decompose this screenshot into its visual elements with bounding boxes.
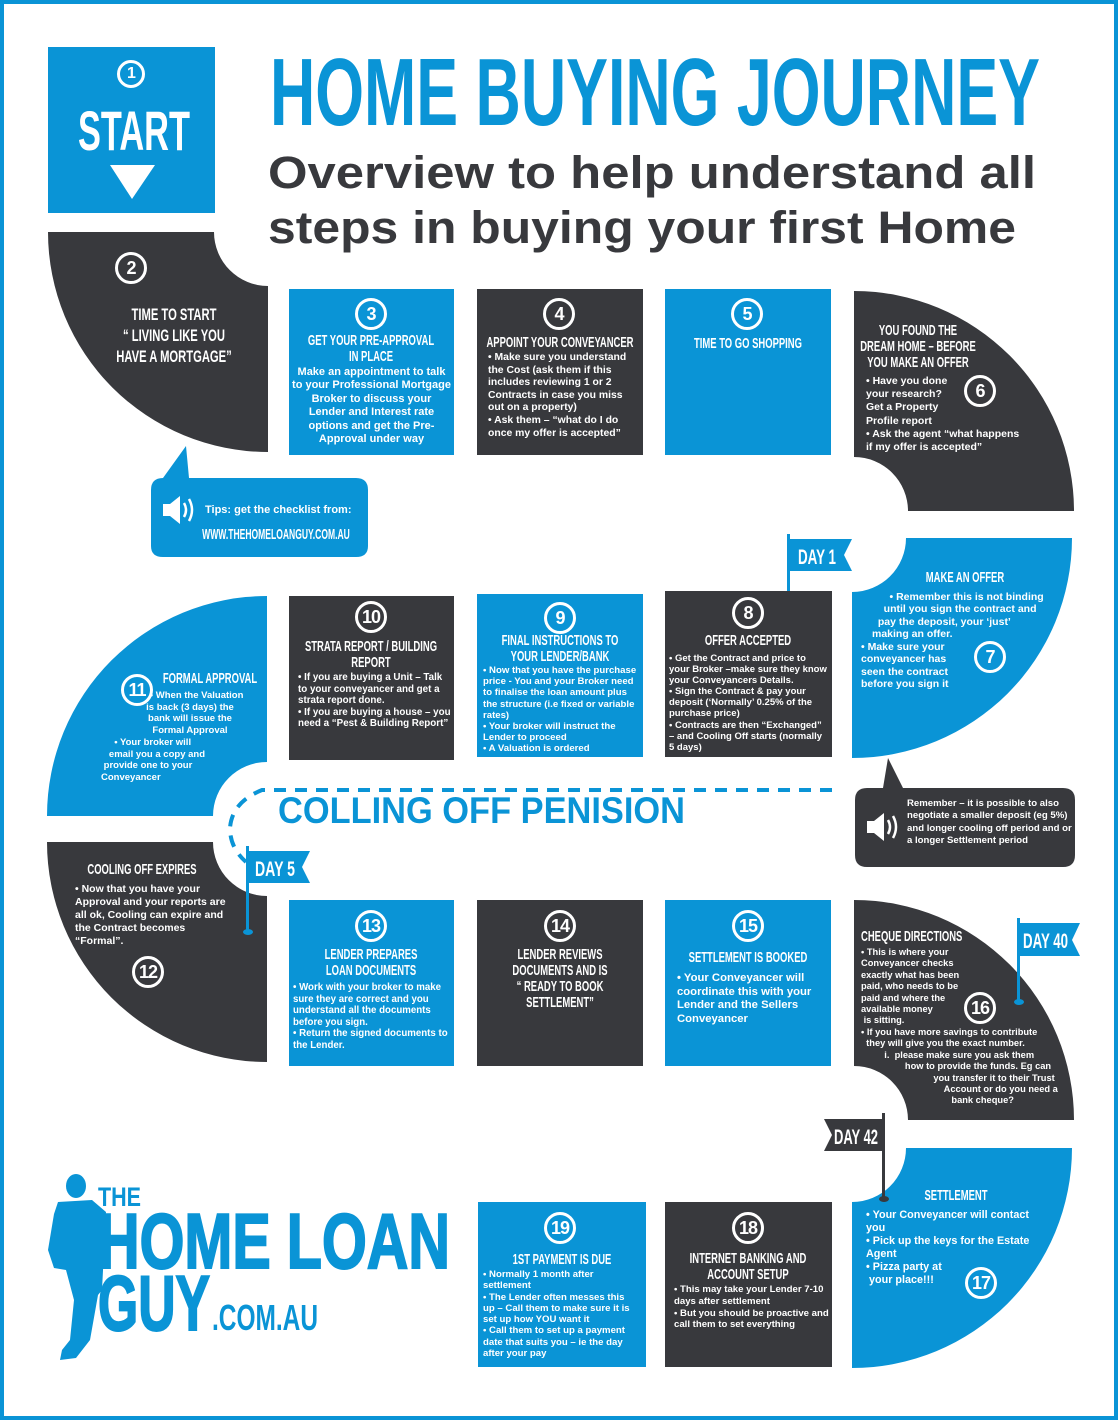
- step 9: • Your broker will instruct the Lender to proceed: [483, 721, 616, 743]
- step 9: • A Valuation is ordered: [483, 743, 590, 754]
- step 14: LENDER REVIEWS: [517, 946, 603, 963]
- step 4: [477, 289, 643, 455]
- step 6: your research?: [866, 388, 942, 400]
- step 14: [477, 900, 643, 1066]
- step 16: CHEQUE DIRECTIONS: [861, 928, 962, 945]
- step 2: 2: [126, 258, 136, 278]
- step 9: 9: [555, 608, 564, 628]
- step 7: making an offer.: [872, 628, 953, 640]
- step 4: APPOINT YOUR CONVEYANCER: [486, 334, 634, 351]
- step 7: until you sign the contract and: [884, 603, 1037, 615]
- step 15: 15: [739, 916, 757, 936]
- step 13: • Work with your broker to make sure they are correct and you understand all the documents before you sign.: [293, 982, 441, 1028]
- step 3: IN PLACE: [349, 348, 393, 365]
- step 19: • Normally 1 month after settlement: [483, 1269, 594, 1291]
- step 8: • Get the Contract and price to your Broker –make sure they know your Conveyancers Details.: [669, 653, 827, 686]
- step 19: • Call them to set up a payment date that suits you – ie the day after your pay: [483, 1325, 625, 1359]
- number 1: 1: [127, 65, 135, 82]
- step 18: • But you should be proactive and call them to set everything: [674, 1308, 829, 1330]
- step 11: is back (3 days) the: [146, 702, 234, 712]
- step 13: 13: [362, 916, 380, 936]
- step 8: 8: [743, 603, 752, 623]
- step 16: • If you have more savings to contribute: [861, 1027, 1037, 1037]
- step 12: 12: [139, 962, 157, 982]
- flag: day 42: [824, 1113, 889, 1202]
- step 16: bank cheque?: [951, 1095, 1014, 1105]
- step 8: • Contracts are then “Exchanged” – and Cooling Off starts (normally 5 days): [669, 720, 822, 753]
- step 6: YOU MAKE AN OFFER: [867, 354, 969, 371]
- step 10: STRATA REPORT / BUILDING: [305, 638, 437, 655]
- step 11: provide one to your: [104, 760, 192, 771]
- callout: tips: [151, 446, 368, 557]
- step 17: • Your Conveyancer will contact you: [866, 1209, 1029, 1234]
- step 19: 19: [551, 1218, 569, 1238]
- step 11: 11: [128, 680, 146, 700]
- step 9: • Now that you have the purchase price - You and your Broker need to finalise the loan amount plus the structure (i.e fixed or variable rates): [483, 665, 636, 721]
- step 7: • Make sure your conveyancer has seen the contract before you sign it: [861, 641, 949, 690]
- step 13: • Return the signed documents to the Lender.: [293, 1028, 448, 1050]
- step 6: • Ask the agent “what happens: [866, 428, 1019, 440]
- step 3: [289, 289, 454, 455]
- step 2: “ LIVING LIKE YOU: [123, 326, 225, 345]
- step 5: 5: [742, 304, 752, 324]
- step 7: pay the deposit, your ‘just’: [878, 616, 1011, 628]
- flag: day 40: [1014, 918, 1080, 1005]
- step 12: COOLING OFF EXPIRES: [87, 861, 197, 878]
- step 2: TIME TO START: [132, 305, 216, 324]
- step 4: • Make sure you understand the Cost (ask them if this includes reviewing 1 or 2 Contracts in case you miss out on a property): [488, 352, 626, 413]
- step 10: [289, 596, 454, 760]
- step 3: Make an appointment to talk to your Professional Mortgage Broker to discuss your Lender and Interest rate options and get the Pre-Approval under way: [292, 366, 451, 445]
- step 18: [665, 1202, 832, 1367]
- step 6: • Have you done: [866, 375, 947, 387]
- step 19: 1ST PAYMENT IS DUE: [513, 1251, 611, 1268]
- step 17: SETTLEMENT: [924, 1187, 988, 1204]
- step 6: 6: [975, 381, 984, 401]
- step 9: YOUR LENDER/BANK: [511, 648, 609, 665]
- step 9: FINAL INSTRUCTIONS TO: [502, 632, 618, 649]
- step 16: i. please make sure you ask them: [884, 1050, 1034, 1060]
- step 3: 3: [366, 304, 376, 324]
- step 8: [665, 591, 832, 757]
- step 10: REPORT: [351, 654, 391, 671]
- flag: day 5: [243, 846, 310, 935]
- step 6: [854, 291, 1074, 511]
- step 2: [48, 232, 268, 452]
- step 13: LENDER PREPARES: [325, 946, 417, 963]
- step 17: [852, 1148, 1072, 1368]
- icon: speaker: [163, 496, 192, 524]
- number 1: [117, 60, 145, 88]
- step 18: ACCOUNT SETUP: [707, 1266, 789, 1283]
- step 8: OFFER ACCEPTED: [705, 632, 791, 649]
- step 12: [47, 842, 267, 1062]
- callout: tips: WWW.THEHOMELOANGUY.COM.AU: [202, 526, 350, 543]
- step 5: [665, 289, 831, 455]
- cooling off dashed path: [228, 788, 832, 864]
- step 7: MAKE AN OFFER: [926, 569, 1004, 586]
- step 19: [478, 1202, 646, 1367]
- title: [268, 40, 1040, 253]
- step 3: GET YOUR PRE-APPROVAL: [308, 332, 434, 349]
- step 11: • When the Valuation: [150, 690, 243, 701]
- step 11: email you a copy and: [109, 748, 205, 760]
- logo: [48, 1174, 450, 1360]
- step 7: • Remember this is not binding: [890, 591, 1044, 603]
- step 15: [665, 900, 831, 1066]
- step 10: • If you are buying a Unit – Talk to your conveyancer and get a strata report done.: [298, 672, 442, 706]
- logo: THE: [98, 1182, 141, 1212]
- step 8: • Sign the Contract & pay your deposit (‘Normally’ 0.25% of the purchase price): [669, 686, 812, 719]
- step 6: Get a Property: [866, 401, 938, 413]
- step 12: • Now that you have your Approval and your reports are all ok, Cooling can expire and the Contract becomes “Formal”.: [75, 883, 226, 947]
- step 14: SETTLEMENT”: [526, 994, 594, 1011]
- step 11: Conveyancer: [101, 772, 161, 782]
- title: steps in buying your first Home: [268, 202, 1016, 253]
- step 11: • Your broker will: [114, 737, 191, 748]
- step 4: • Ask them – “what do I do once my offer is accepted”: [488, 415, 621, 439]
- logo: GUY: [98, 1259, 210, 1347]
- step 17: • Pick up the keys for the Estate Agent: [866, 1235, 1029, 1260]
- step 13: [289, 900, 454, 1066]
- step 17: your place!!!: [869, 1274, 934, 1286]
- icon: man silhouette: [48, 1174, 106, 1360]
- step 18: 18: [739, 1218, 757, 1238]
- step 19: • The Lender often messes this up – Call them to make sure it is set up how YOU want it: [483, 1292, 630, 1325]
- step 17: 17: [972, 1273, 990, 1293]
- step 11: bank will issue the: [148, 713, 232, 724]
- step 16: [854, 900, 1074, 1120]
- step 11: Formal Approval: [152, 724, 228, 736]
- step 10: 10: [362, 607, 380, 627]
- step 16: 16: [971, 998, 989, 1018]
- step 18: • This may take your Lender 7-10 days after settlement: [674, 1284, 823, 1307]
- step 16: is sitting.: [864, 1015, 904, 1025]
- step 1: start box: [48, 47, 215, 213]
- start label: [78, 99, 190, 199]
- callout: remember: [855, 758, 1075, 867]
- step 14: “ READY TO BOOK: [517, 978, 603, 995]
- step 16: how to provide the funds. Eg can: [905, 1061, 1051, 1071]
- step 2: HAVE A MORTGAGE”: [116, 347, 232, 366]
- step 6: Profile report: [866, 415, 932, 427]
- icon: speaker: [867, 813, 896, 841]
- callout: tips: Tips: get the checklist from:: [205, 504, 352, 516]
- flag: day 1: [787, 534, 852, 591]
- step 11: [47, 596, 267, 816]
- title: Overview to help understand all: [268, 147, 1036, 198]
- step 6: DREAM HOME – BEFORE: [860, 338, 976, 355]
- step 6: if my offer is accepted”: [866, 441, 982, 453]
- step 11: FORMAL APPROVAL: [163, 670, 257, 687]
- step 14: DOCUMENTS AND IS: [512, 962, 608, 979]
- step 7: [852, 538, 1072, 758]
- step 16: you transfer it to their Trust: [933, 1073, 1055, 1083]
- step 18: INTERNET BANKING AND: [690, 1250, 806, 1267]
- step 17: • Pizza party at: [866, 1261, 942, 1273]
- step 16: they will give you the exact number.: [866, 1038, 1025, 1048]
- step 6: YOU FOUND THE: [879, 322, 957, 339]
- flag: day 5: DAY 5: [255, 858, 295, 881]
- step 16: Account or do you need a: [944, 1084, 1058, 1094]
- step 15: SETTLEMENT IS BOOKED: [689, 949, 807, 966]
- step 14: 14: [551, 916, 569, 936]
- step 5: TIME TO GO SHOPPING: [694, 335, 802, 352]
- step 7: 7: [985, 647, 994, 667]
- callout: remember: Remember – it is possible to also negotiate a smaller deposit (eg 5%) and longer cooling off period and or a longer Settlement period: [907, 798, 1072, 846]
- step 13: LOAN DOCUMENTS: [326, 962, 416, 979]
- step 16: • This is where your Conveyancer checks exactly what has been paid, who needs to be paid and where the available money: [861, 947, 959, 1014]
- step 9: [477, 594, 643, 757]
- logo: .COM.AU: [212, 1297, 318, 1338]
- step 15: • Your Conveyancer will coordinate this with your Lender and the Sellers Conveyancer: [677, 972, 811, 1025]
- step 10: • If you are buying a house – you need a “Pest & Building Report”: [298, 707, 451, 729]
- step 4: 4: [554, 304, 564, 324]
